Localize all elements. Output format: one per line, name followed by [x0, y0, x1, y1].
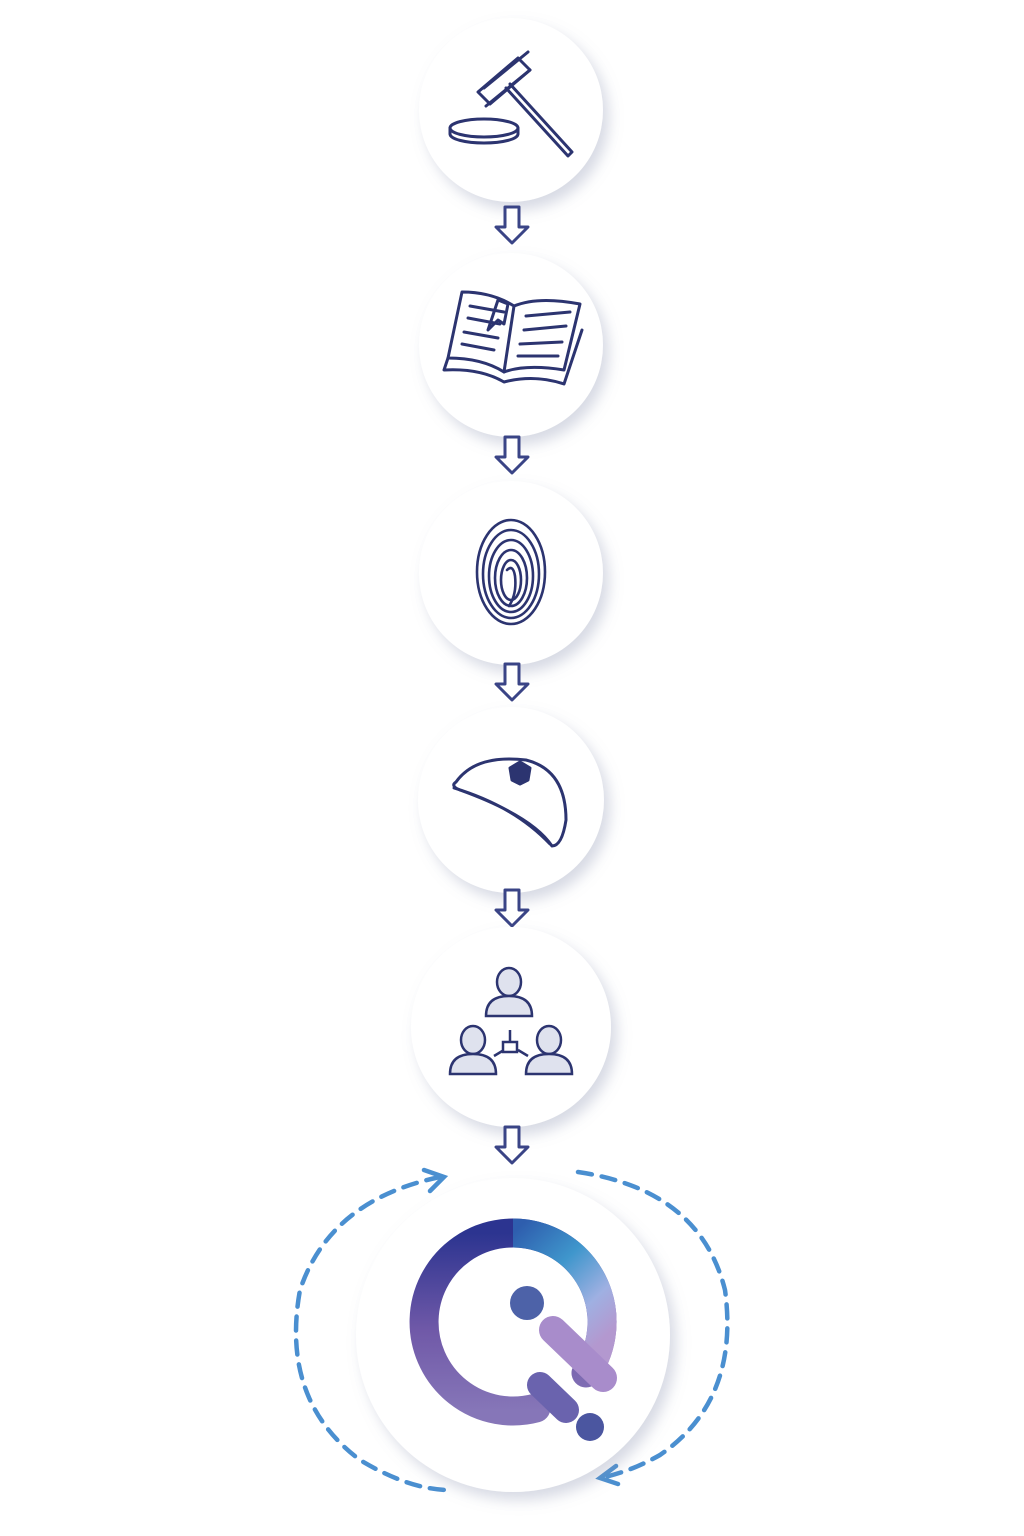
arrow 5 [496, 1127, 528, 1163]
icon: open book [444, 292, 582, 384]
circle 2: book [419, 253, 603, 437]
circle 4: beret [418, 707, 604, 893]
arrow 4 [496, 890, 528, 926]
dashed cycle arrows [296, 1170, 727, 1490]
arrow 1 [496, 207, 528, 243]
icon: gavel [450, 52, 572, 156]
arrow 3 [496, 664, 528, 700]
logo circle [356, 1178, 670, 1492]
icon: beret [454, 759, 566, 846]
circle 1: gavel [419, 18, 603, 202]
icon: team hierarchy [450, 968, 572, 1074]
circle 5: team [411, 927, 611, 1127]
arrow 2 [496, 437, 528, 473]
circle 3: fingerprint [419, 481, 603, 665]
logo: Q mark [424, 1233, 604, 1441]
icon: fingerprint [477, 520, 545, 624]
